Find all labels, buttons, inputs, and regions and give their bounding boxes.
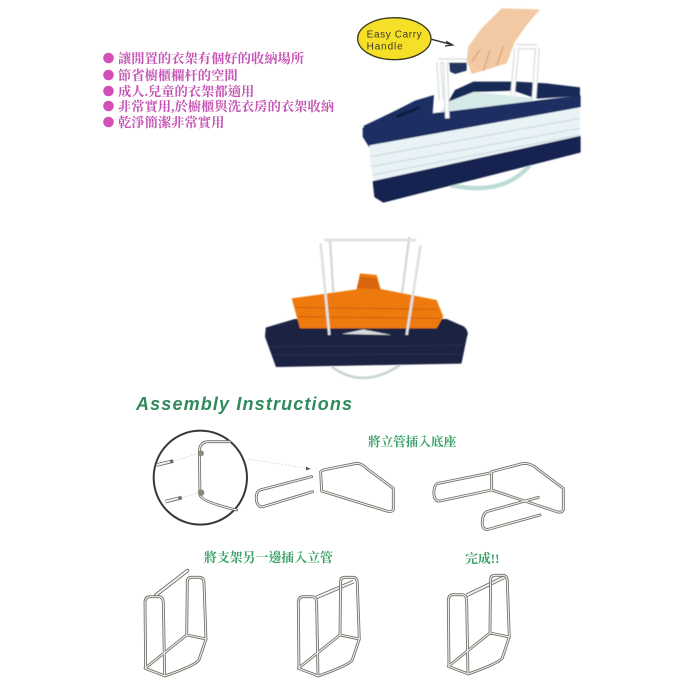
insertion pins [157,461,182,502]
caption: step 1: 將立管插入底座 [368,434,457,449]
caption: step 2: 將支架另一邊插入立管 [204,550,333,565]
joint sockets [198,450,204,456]
interior of stack [435,92,537,119]
base frame [321,463,393,511]
orange hanger [292,273,443,328]
callout: easy carry handle [358,18,431,60]
straight tube piece [256,477,313,507]
left hanger hook [363,95,434,135]
hanger handle wires: shadow [439,47,537,118]
feature 2: 節省櫥櫃欄杆的空間 [118,67,238,83]
joint tube [199,442,237,510]
white hanger layers [369,107,580,183]
diagram: tubes inserted in base [434,463,563,529]
front wires [321,240,421,335]
photo: orange hanger in holder [266,237,467,378]
feature 4: 非常實用,於櫥櫃與洗衣房的衣架收納 [118,98,334,115]
diagram: rod being inserted [145,571,206,676]
heading: assembly instructions: Assembly Instructions [135,394,352,414]
centre wire base [342,329,392,335]
feature list [103,50,334,130]
rear wires [330,237,409,335]
dark hanger piece behind the hand [449,63,467,74]
caption: done: 完成!! [465,551,499,566]
photo: hand carrying hanger stack [358,8,580,202]
lower navy band [373,137,580,202]
diagram: magnified joint [154,431,393,525]
back rail of hangers [448,82,580,102]
diagram: rod fully inserted [298,577,359,676]
bottom handle loop [450,165,530,188]
callout: easy carry handle: Handle [367,41,403,52]
callout: easy carry handle: Easy Carry [367,30,422,41]
feature 3: 成人.兒童的衣架都適用 [118,83,254,99]
feature 5: 乾淨簡潔非常實用 [118,114,224,130]
magnifier circle [154,431,247,525]
feature 1: 讓閒置的衣架有個好的收納場所 [118,50,304,66]
hand [467,8,540,74]
hanger handle wires [439,47,537,118]
top navy band [363,96,580,147]
diagram: finished holder [448,575,509,674]
guide lines [175,453,307,498]
arrow to handle [432,39,453,46]
dark hanger tray [266,320,467,366]
bottom handle loop [332,365,400,378]
